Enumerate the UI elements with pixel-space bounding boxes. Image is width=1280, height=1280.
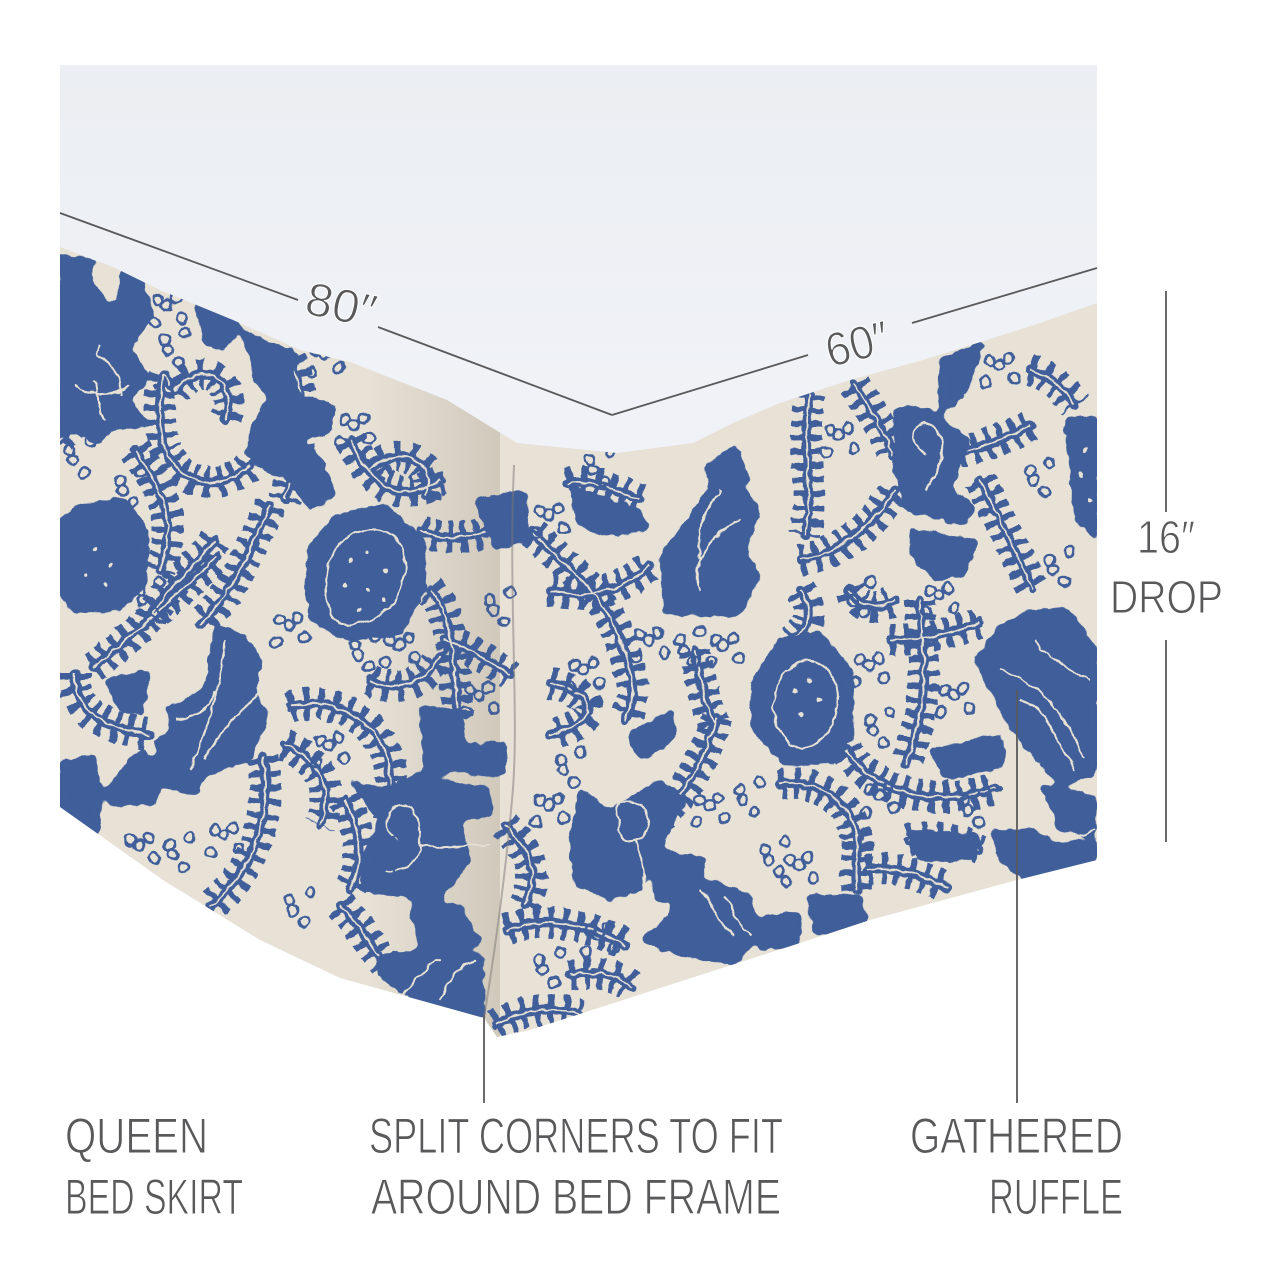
label: queen bed skirt: QUEEN <box>65 1108 208 1164</box>
label: gathered ruffle: RUFFLE <box>989 1169 1123 1225</box>
white speckles in flowers <box>83 448 1093 718</box>
dimension: 16 inch drop <box>1110 291 1223 842</box>
label: gathered ruffle <box>910 1108 1123 1225</box>
vines and spiny leaves <box>60 360 1075 1025</box>
label: split corners to fit around bed frame: AROUND BED FRAME <box>371 1169 781 1225</box>
dimension: 80 inch length: 80″ <box>301 271 382 338</box>
ring dot clusters <box>65 293 1075 987</box>
callout leader: split corners <box>483 1015 485 1103</box>
dimension: 60 inch width: 60″ <box>820 310 895 377</box>
dimension: 16 inch drop: 16″ <box>1137 511 1195 563</box>
flower petal outlines <box>75 345 1095 1000</box>
label: split corners to fit around bed frame: SPLIT CORNERS TO FIT <box>369 1108 783 1164</box>
label: queen bed skirt <box>65 1108 243 1225</box>
callout leader: gathered ruffle <box>1016 690 1018 1103</box>
label: gathered ruffle: GATHERED <box>910 1108 1123 1164</box>
blue flower blooms and leaves <box>58 255 1097 1030</box>
split corner fold <box>484 465 515 1018</box>
label: split corners to fit around bed frame <box>369 1108 783 1225</box>
mattress top surface <box>60 65 1097 480</box>
bed skirt fabric panel <box>50 240 1110 1040</box>
label: queen bed skirt: BED SKIRT <box>65 1169 243 1225</box>
dimension: 16 inch drop: DROP <box>1110 571 1223 623</box>
dimension: 60 inch width <box>612 268 1097 415</box>
dimension: 80 inch length <box>60 213 612 415</box>
floral print <box>58 255 1097 1030</box>
